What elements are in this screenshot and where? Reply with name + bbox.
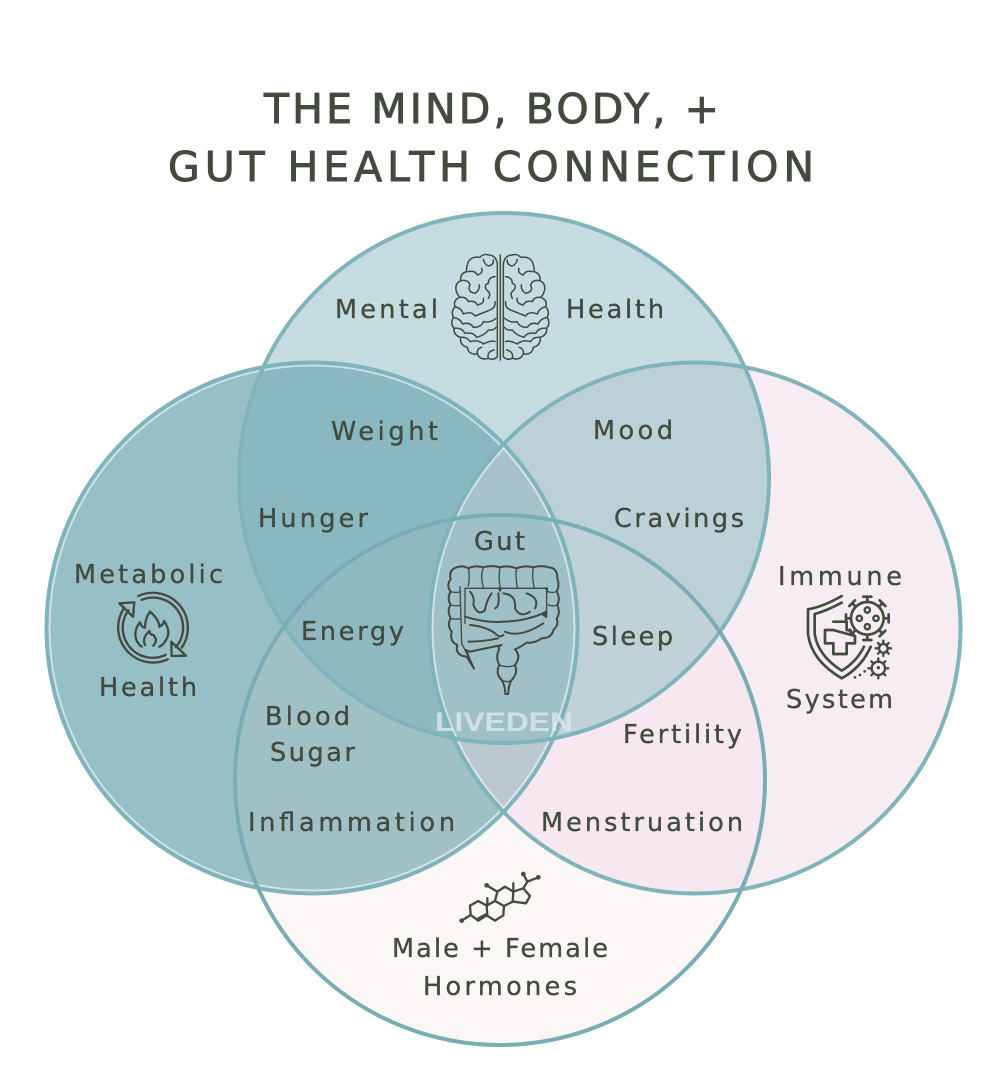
overlap labels: Fertility (623, 720, 742, 750)
icon: flame in cycle arrows (118, 593, 188, 663)
panel: male and female hormones (392, 872, 608, 1002)
panel: immune system: Immune (778, 562, 902, 592)
panel: immune system (778, 562, 902, 715)
icon: brain (452, 255, 549, 360)
logo: liveden: LIVEDEN (435, 707, 573, 737)
icon: steroid molecule (459, 872, 541, 923)
overlap labels: Sugar (270, 738, 356, 768)
overlap labels: Mood (593, 416, 673, 446)
panel: metabolic health (74, 560, 223, 703)
overlap labels: Weight (331, 417, 438, 447)
panel: immune system: System (786, 685, 893, 715)
overlap labels: Blood (265, 702, 350, 732)
overlap labels: Inflammation (248, 808, 455, 838)
panel: metabolic health: Metabolic (74, 560, 223, 590)
icon: intestines (448, 566, 559, 694)
panel: metabolic health: Health (99, 673, 197, 703)
overlap labels: Cravings (614, 504, 744, 534)
panel: male and female hormones: Hormones (423, 972, 577, 1002)
overlap labels: Sleep (592, 622, 673, 652)
center: gut: Gut (474, 527, 525, 557)
panel: mental health: Health (566, 295, 664, 325)
icon: shield with virus (808, 596, 891, 679)
overlap labels: Menstruation (541, 808, 743, 838)
panel: mental health: Mental (335, 295, 438, 325)
overlap labels: Energy (301, 617, 404, 647)
title: GUT HEALTH CONNECTION (168, 143, 814, 191)
title (168, 85, 814, 191)
venn diagram: four overlapping circles (46, 213, 961, 1045)
panel: mental health (335, 255, 664, 360)
center: gut (448, 527, 559, 694)
overlap labels: Hunger (258, 504, 369, 534)
overlap labels (248, 416, 744, 838)
title: THE MIND, BODY, + (263, 85, 719, 133)
panel: male and female hormones: Male + Female (392, 934, 608, 964)
